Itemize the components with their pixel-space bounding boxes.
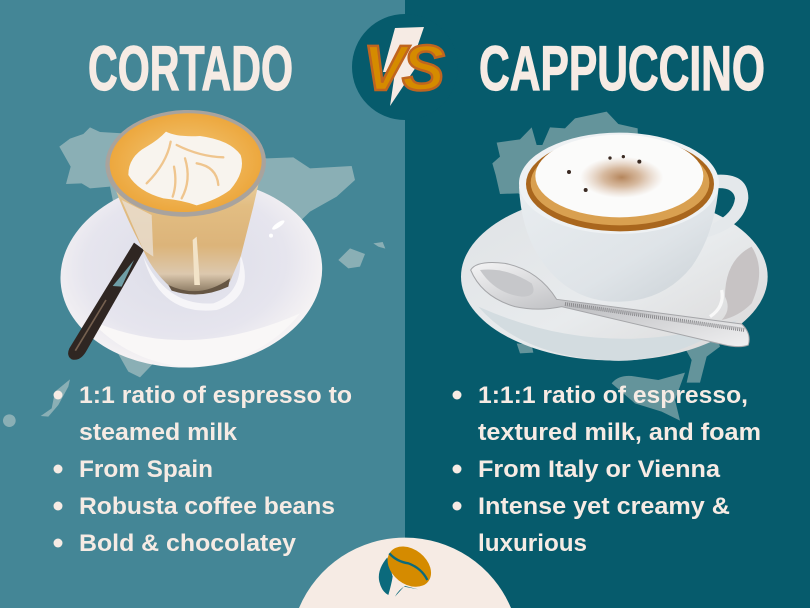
latte art [128, 132, 242, 205]
footer: cream semicircle [299, 538, 511, 608]
cinnamon mound [580, 157, 663, 198]
list: cortado facts: Bold & chocolatey [79, 530, 297, 557]
badge circle [352, 14, 458, 120]
coffee crema ring [526, 137, 714, 231]
list: cappuccino facts: Intense yet creamy & [478, 493, 730, 520]
panel: cappuccino background [405, 0, 810, 608]
cinnamon specks [567, 155, 641, 192]
list: cappuccino facts: From Italy or Vienna [478, 456, 721, 483]
saucer [54, 170, 329, 376]
vs text: S [402, 32, 445, 104]
badge: versus [352, 14, 458, 120]
list: cappuccino facts: luxurious [478, 530, 587, 557]
cup bowl [519, 183, 719, 302]
title: cortado: CORTADO [88, 34, 293, 104]
spoon [68, 243, 144, 360]
list: cortado facts: steamed milk [79, 419, 238, 446]
map: Spain silhouette [3, 127, 385, 427]
cup rim [519, 133, 719, 234]
saucer [461, 193, 768, 361]
list: cappuccino facts [452, 382, 761, 557]
image: cappuccino on saucer [461, 133, 768, 361]
map: Italy silhouette [492, 112, 720, 421]
list: cortado facts: 1:1 ratio of espresso to [79, 382, 352, 409]
list: cortado facts: Robusta coffee beans [79, 493, 335, 520]
list: cortado facts [54, 382, 352, 557]
glass cup [104, 107, 268, 295]
vs text: V [363, 32, 411, 104]
milk foam [535, 135, 703, 217]
icon: coffee bean logo [379, 538, 439, 597]
list: cappuccino facts: 1:1:1 ratio of espresso, [478, 382, 748, 409]
icon: lightning bolt [383, 27, 424, 106]
spoon [471, 262, 749, 347]
list: cappuccino facts: textured milk, and foam [478, 419, 761, 446]
cup handle [707, 175, 748, 237]
list: cortado facts: From Spain [79, 456, 213, 483]
panel: cortado background [0, 0, 405, 608]
image: cortado on saucer [54, 107, 329, 376]
